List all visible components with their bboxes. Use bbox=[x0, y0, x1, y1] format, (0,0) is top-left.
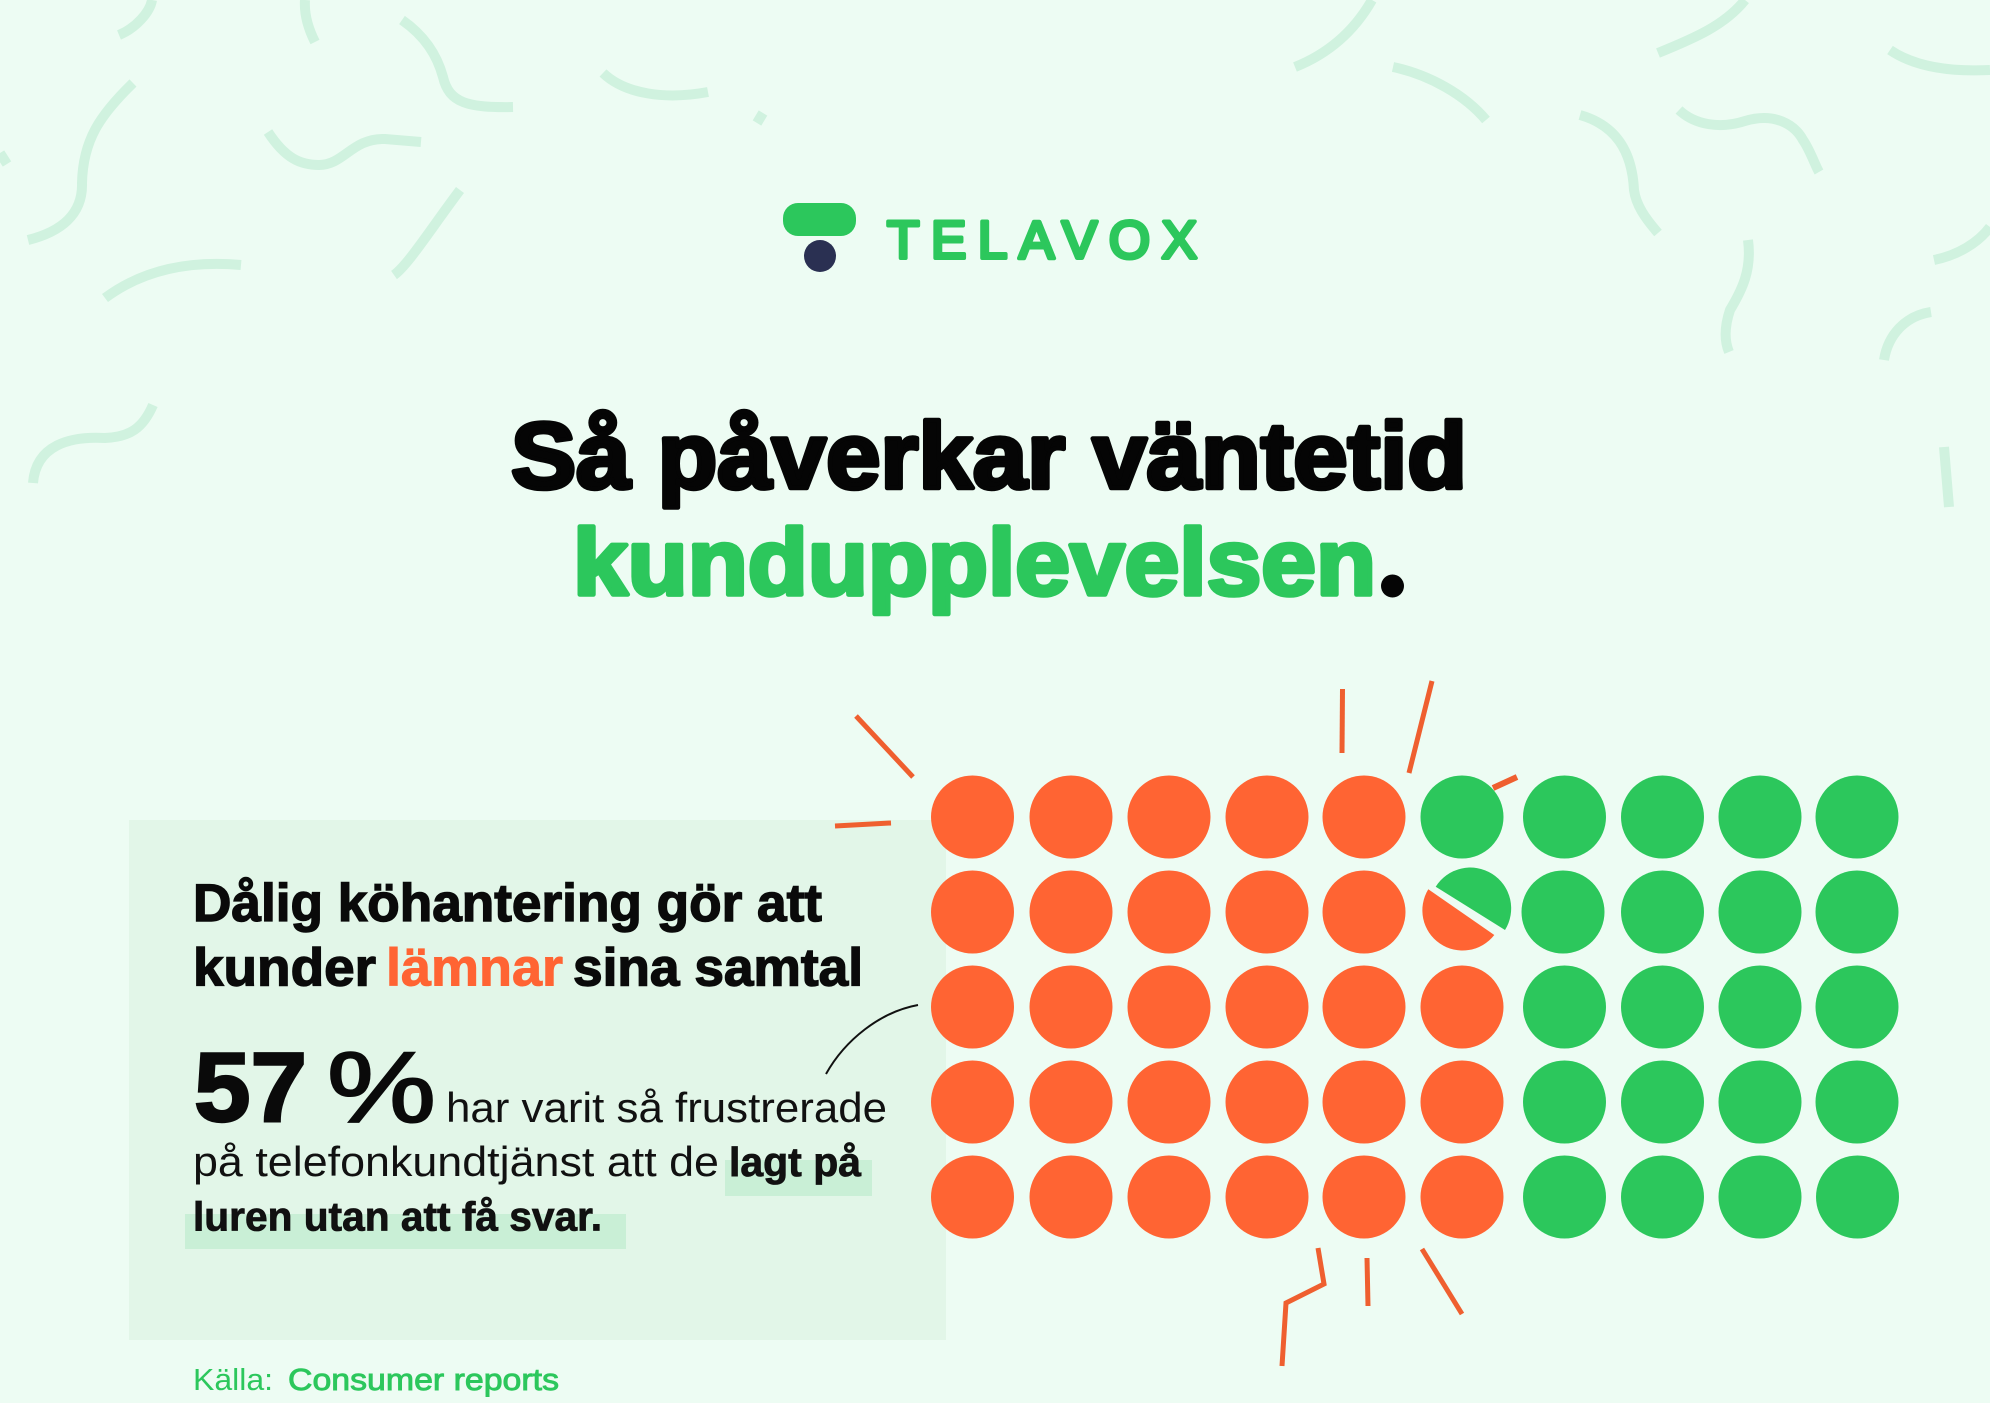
orange dots bbox=[931, 776, 1504, 1238]
highlight: lagt på bbox=[725, 1160, 872, 1196]
logo: Telavox bbox=[783, 203, 1197, 272]
heading line 1: Dålig köhantering gör att bbox=[193, 874, 822, 933]
heading word: kunder: kunder bbox=[193, 938, 376, 998]
body line 1: har varit så frustrerade bbox=[446, 1084, 887, 1131]
dot chart: 57 of 100 bbox=[931, 776, 1899, 1238]
split dot: green half bbox=[1436, 868, 1511, 930]
title line 2: green highlight word: kundupplevelsen bbox=[573, 510, 1376, 614]
burst lines bbox=[835, 681, 1517, 1366]
source label: Källa: bbox=[193, 1362, 273, 1397]
body bold: luren utan att få svar: luren utan att få svar. bbox=[193, 1194, 602, 1240]
source name: Consumer reports bbox=[288, 1362, 559, 1397]
title bbox=[511, 403, 1467, 614]
body text bbox=[185, 1084, 887, 1249]
heading words: sina samtal: sina samtal bbox=[573, 938, 863, 998]
body line 2: på telefonkundtjänst att de bbox=[193, 1138, 719, 1185]
heading word: lämnar: lämnar bbox=[386, 938, 563, 998]
highlight: luren utan att få svar bbox=[185, 1214, 626, 1249]
body bold: lagt på: lagt på bbox=[729, 1139, 861, 1185]
panel heading bbox=[193, 874, 863, 998]
source bbox=[193, 1362, 559, 1397]
callout line bbox=[826, 1005, 918, 1074]
icon: logo pill bbox=[783, 203, 856, 236]
statistic: 57 % bbox=[194, 1032, 436, 1144]
panel background bbox=[129, 820, 946, 1340]
icon: logo dot bbox=[804, 240, 836, 272]
split dot bbox=[1422, 868, 1511, 951]
panel: queue statistic bbox=[129, 820, 946, 1340]
title line 1: Så påverkar väntetid bbox=[511, 403, 1467, 508]
green dots bbox=[1420, 776, 1899, 1238]
split dot: orange half bbox=[1422, 889, 1494, 951]
number 57: 57 bbox=[194, 1032, 307, 1142]
title period bbox=[1381, 574, 1404, 598]
logo wordmark: TELAVOX bbox=[887, 211, 1197, 270]
percent sign: % bbox=[327, 1032, 436, 1144]
